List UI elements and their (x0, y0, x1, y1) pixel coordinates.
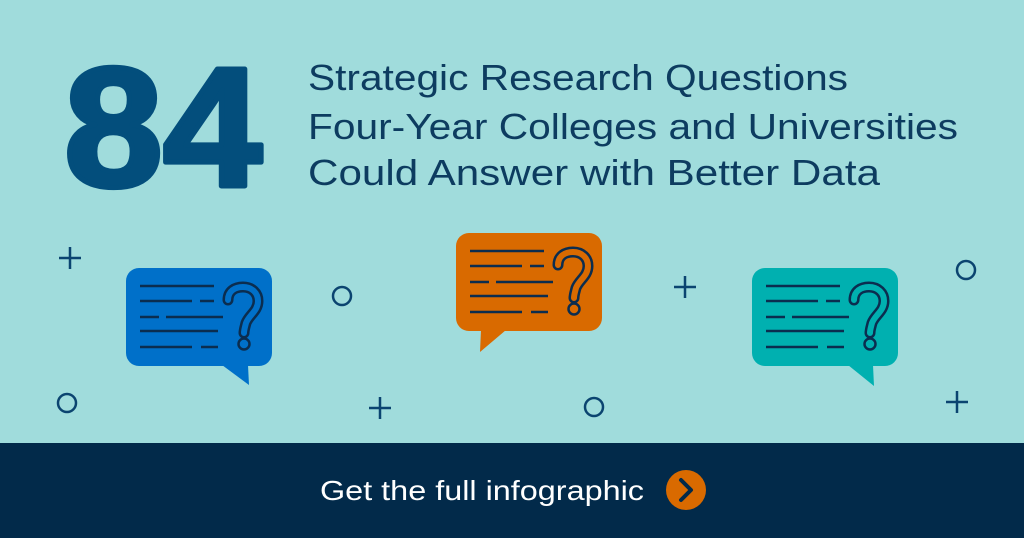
title: Strategic Research Questions (308, 57, 848, 98)
footer banner (0, 443, 1024, 538)
icon: blue speech bubble (126, 268, 272, 385)
title (308, 57, 958, 193)
call to action text: Get the full infographic (320, 475, 644, 506)
decorations (58, 247, 975, 419)
title: Could Answer with Better Data (308, 152, 881, 193)
title: Four-Year Colleges and Universities (308, 106, 958, 147)
icon: teal speech bubble (752, 268, 898, 386)
big number 84: 84 (64, 33, 262, 223)
icon: orange arrow button (666, 470, 706, 510)
icon: orange speech bubble (456, 233, 602, 352)
